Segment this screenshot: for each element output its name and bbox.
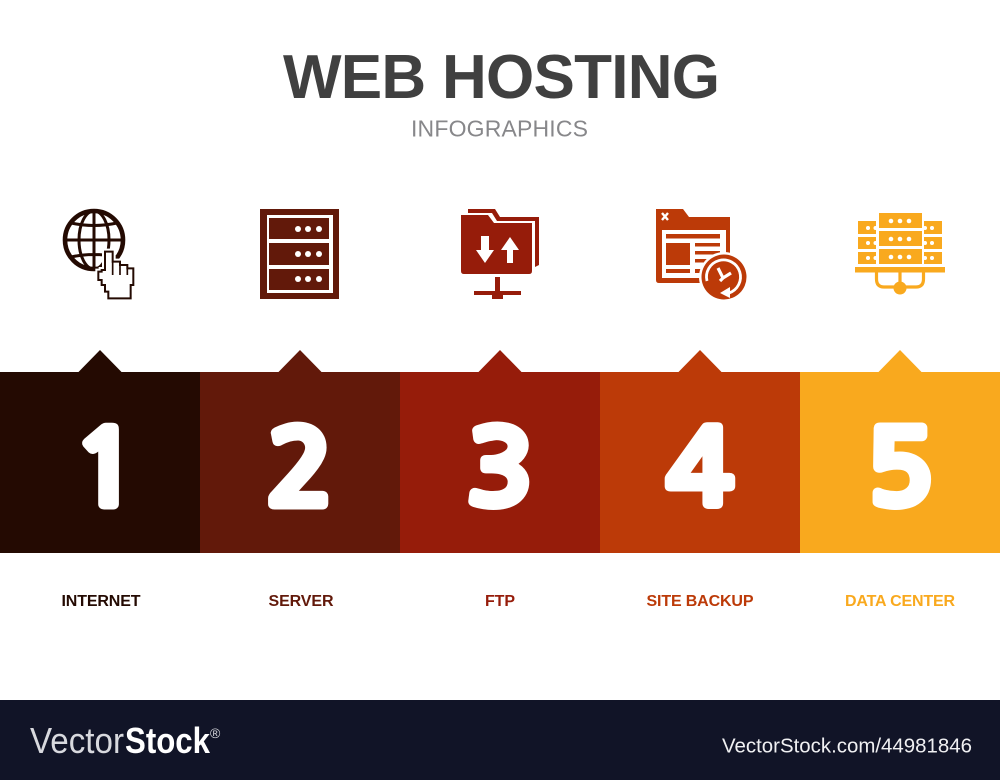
icon: data center (855, 213, 945, 294)
panel 4: site backup (600, 350, 800, 553)
footer image id: VectorStock.com/44981846 (722, 736, 972, 758)
panel 1: internet (0, 350, 200, 553)
icon: site backup (656, 209, 749, 302)
panel 4: site backup: 4 (666, 419, 734, 521)
subtitle: INFOGRAPHICS (411, 116, 588, 142)
panel 5: data center (800, 350, 1000, 553)
footer bar (0, 700, 1000, 780)
label: site backup: SITE BACKUP (646, 593, 754, 610)
label: ftp: FTP (485, 593, 515, 610)
panel 2: server: 2 (266, 419, 334, 521)
footer logo (30, 720, 211, 761)
title: WEB HOSTING (283, 43, 720, 112)
footer registered mark: ® (210, 725, 221, 741)
panel 5: data center: 5 (866, 419, 934, 521)
panel 3: ftp (400, 350, 600, 553)
footer logo: Vector (30, 720, 124, 761)
footer logo: Stock (125, 720, 211, 761)
icon: globe with hand cursor (65, 210, 133, 298)
icon: FTP folder (461, 209, 539, 299)
panel 1: internet: 1 (72, 419, 140, 521)
icon: server rack (260, 209, 339, 299)
label: data center: DATA CENTER (845, 593, 955, 610)
panel 2: server (200, 350, 400, 553)
panel 3: ftp: 3 (466, 419, 534, 521)
label: internet: INTERNET (62, 593, 141, 610)
label: server: SERVER (268, 593, 334, 610)
